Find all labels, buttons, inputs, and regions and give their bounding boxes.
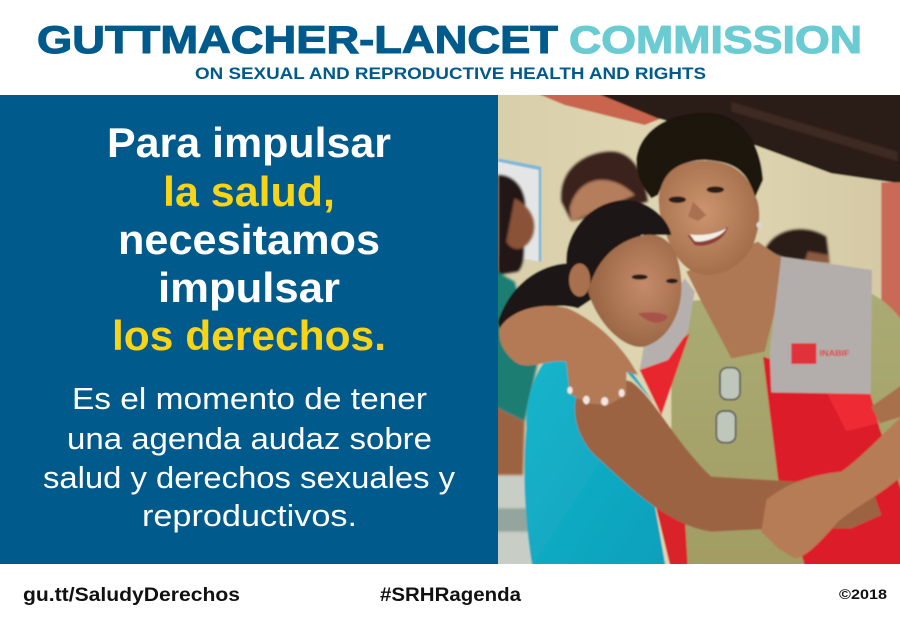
girl: ear and features xyxy=(569,263,678,323)
body text: una agenda audaz sobre xyxy=(67,421,432,456)
woman: upper right arm skin xyxy=(871,382,900,423)
footer xyxy=(23,584,888,606)
panel: blue message panel xyxy=(0,95,498,564)
footer hashtag: #SRHRagenda xyxy=(380,584,521,606)
woman: hair xyxy=(636,113,763,198)
woman: arm and hand at waist xyxy=(761,412,900,558)
headline: necesitamos xyxy=(118,216,380,263)
photo: woman and girl embracing xyxy=(491,88,900,571)
body text: salud y derechos sexuales y xyxy=(43,460,456,495)
copyright: ©2018 xyxy=(839,587,888,602)
headline: la salud, xyxy=(163,168,335,215)
woman: fingernails xyxy=(567,387,625,406)
woman: arm over girl's shoulder xyxy=(499,306,638,405)
girl: arm hugging woman xyxy=(575,379,881,532)
glasses xyxy=(716,368,740,443)
subtitle: ON SEXUAL AND REPRODUCTIVE HEALTH AND RIGHTS xyxy=(195,65,706,83)
girl: face xyxy=(588,235,681,347)
woman: face xyxy=(659,161,759,275)
woman: neck and chest xyxy=(686,242,781,358)
headline: Para impulsar xyxy=(107,119,391,166)
vest logo INABIF: INABIF xyxy=(820,349,850,358)
girl: hair xyxy=(498,200,671,335)
body text: reproductivos. xyxy=(142,498,357,533)
headline: impulsar xyxy=(158,264,340,311)
woman: body and green sweater xyxy=(671,292,900,571)
vest logo INABIF xyxy=(791,343,850,364)
woman: red vest xyxy=(640,333,900,571)
header band xyxy=(0,0,900,95)
body text: Es el momento de tener xyxy=(72,381,427,416)
headline xyxy=(107,119,391,359)
background people xyxy=(491,152,830,475)
footer link: gu.tt/SaludyDerechos xyxy=(23,584,240,606)
title: Guttmacher-Lancet Commission: COMMISSION xyxy=(569,19,862,62)
girl: turquoise shirt xyxy=(524,352,666,571)
headline: los derechos. xyxy=(112,312,386,359)
woman: facial features xyxy=(669,186,763,246)
photo background wall and roof xyxy=(491,88,900,571)
title: Guttmacher-Lancet Commission xyxy=(37,19,862,62)
body text xyxy=(43,381,456,533)
title: Guttmacher-Lancet Commission: GUTTMACHER-LANCET xyxy=(37,19,558,62)
woman: grey vest xyxy=(640,257,872,394)
